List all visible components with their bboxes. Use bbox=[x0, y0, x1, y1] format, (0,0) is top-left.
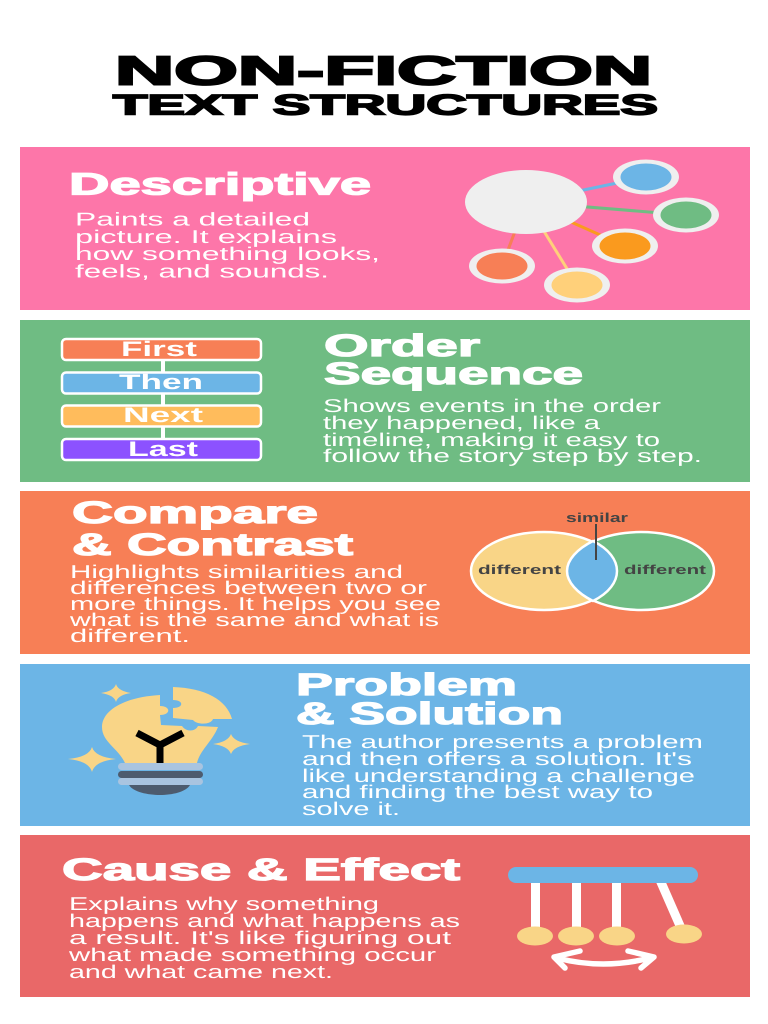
title: NON-FICTION bbox=[115, 48, 652, 94]
icon: newton's cradle bbox=[508, 867, 702, 968]
chart: venn diagram bbox=[471, 510, 714, 610]
text: order sequence body bbox=[323, 395, 702, 466]
heading: order sequence: Order bbox=[324, 328, 480, 363]
text: descriptive body bbox=[75, 208, 380, 282]
chart: venn diagram: different bbox=[478, 562, 562, 577]
text: order sequence body: Shows events in the order bbox=[323, 395, 661, 416]
title bbox=[113, 48, 658, 122]
text: order sequence body: they happened, like a bbox=[323, 412, 601, 433]
text: cause and effect body: a result. It's like figuring out bbox=[69, 927, 451, 948]
text: problem and solution body: The author presents a problem bbox=[302, 731, 703, 752]
icon: sequence chart: Last bbox=[128, 438, 198, 461]
text: descriptive body: feels, and sounds. bbox=[75, 260, 329, 282]
panel: compare and contrast bbox=[20, 491, 750, 654]
text: problem and solution body: solve it. bbox=[302, 798, 400, 819]
icon: sequence chart: Then bbox=[119, 371, 203, 394]
text: compare and contrast body: Highlights similarities and bbox=[70, 561, 403, 582]
text: descriptive body: how something looks, bbox=[75, 243, 380, 264]
text: cause and effect body: happens and what happens as bbox=[69, 910, 460, 931]
text: cause and effect body: and what came next. bbox=[69, 961, 333, 982]
heading: descriptive: Descriptive bbox=[69, 166, 371, 202]
text: order sequence body: follow the story step by step. bbox=[323, 445, 702, 466]
heading: problem and solution: Problem bbox=[296, 667, 517, 702]
heading: compare and contrast: Compare bbox=[72, 495, 318, 530]
text: problem and solution body bbox=[302, 731, 703, 819]
title: TEXT STRUCTURES bbox=[113, 90, 658, 122]
text: cause and effect body bbox=[67, 893, 460, 982]
heading: compare and contrast: & Contrast bbox=[72, 527, 353, 562]
text: problem and solution body: and then offers a solution. It's bbox=[302, 748, 692, 769]
chart: venn diagram: different bbox=[624, 562, 707, 577]
text: problem and solution body: like understanding a challenge bbox=[302, 765, 695, 786]
text: cause and effect body: what made something occur bbox=[67, 944, 436, 965]
text: compare and contrast body: different. bbox=[70, 625, 190, 646]
text: compare and contrast body: what is the same and what is bbox=[68, 609, 439, 630]
heading: problem and solution bbox=[296, 667, 563, 731]
text: cause and effect body: Explains why something bbox=[69, 893, 379, 914]
text: order sequence body: timeline, making it easy to bbox=[323, 429, 660, 450]
icon: sequence chart bbox=[62, 338, 261, 461]
panel: order sequence bbox=[20, 320, 750, 482]
icon: puzzle light bulb bbox=[68, 684, 250, 795]
panel: problem and solution bbox=[20, 664, 750, 826]
panel: descriptive bbox=[20, 147, 750, 310]
text: descriptive body: picture. It explains bbox=[75, 226, 337, 247]
text: compare and contrast body: differences between two or bbox=[70, 577, 427, 598]
icon: sequence chart: Next bbox=[123, 404, 203, 427]
text: problem and solution body: and finding the best way to bbox=[302, 781, 653, 802]
text: compare and contrast body: more things. It helps you see bbox=[70, 593, 441, 614]
icon: concept web bbox=[465, 160, 719, 302]
heading: cause and effect: Cause & Effect bbox=[62, 852, 460, 887]
panel: cause and effect bbox=[20, 835, 750, 997]
icon: sequence chart: First bbox=[121, 338, 197, 361]
heading: order sequence bbox=[324, 328, 583, 391]
heading: order sequence: Sequence bbox=[324, 356, 583, 391]
text: descriptive body: Paints a detailed bbox=[75, 208, 310, 230]
chart: venn diagram: similar bbox=[566, 510, 628, 525]
heading: compare and contrast bbox=[72, 495, 353, 562]
heading: problem and solution: & Solution bbox=[296, 696, 563, 731]
text: compare and contrast body bbox=[68, 561, 441, 646]
